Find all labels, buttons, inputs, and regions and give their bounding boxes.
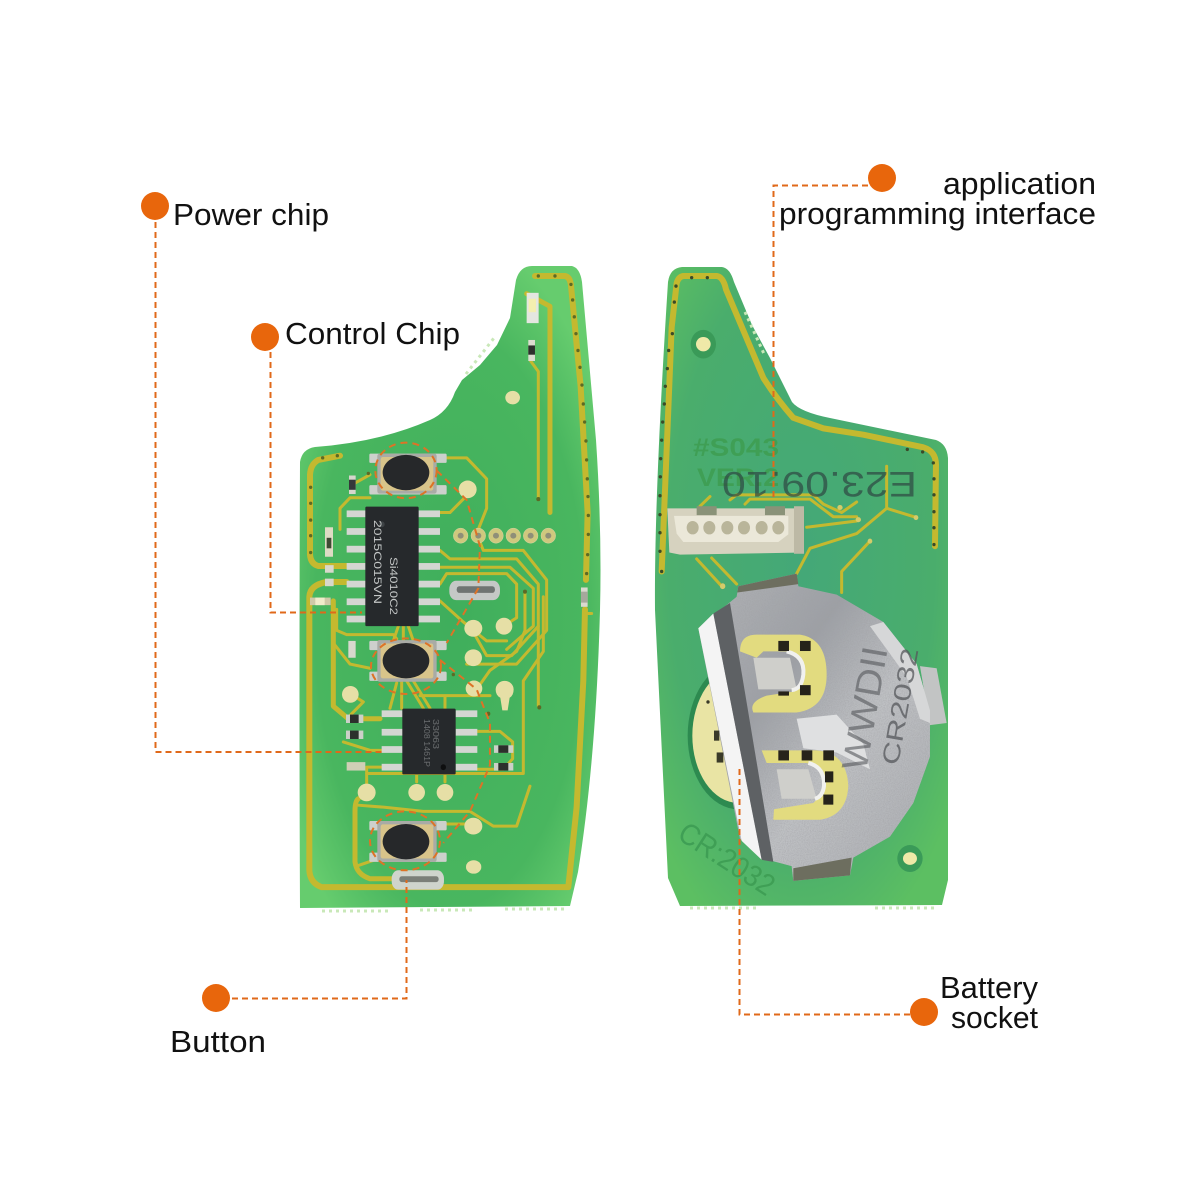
callout: button: [170, 880, 406, 1059]
circuit traces: [333, 458, 592, 866]
via dots right: [658, 276, 936, 573]
board outline left: [300, 266, 600, 908]
tact switches: [369, 454, 447, 862]
chip marking Si4010C2: [371, 520, 399, 615]
chip marking second IC: 1408 1461P: [422, 719, 431, 767]
board detail traces and parts left: [309, 274, 592, 890]
callout: application programming interface: programming interface: [779, 196, 1096, 231]
programming through-holes: [453, 528, 556, 543]
chip marking second IC: [422, 719, 440, 767]
silk text S043: #S043: [693, 434, 779, 462]
chip marking Si4010C2: Si4010C2: [387, 557, 399, 615]
pads: [342, 391, 520, 874]
board detail right: [658, 276, 947, 881]
callout: power chip: [141, 192, 385, 752]
board silk text holder pads: [691, 330, 923, 872]
chip marking second IC: 33063: [431, 719, 440, 750]
contact pad dots: [706, 700, 723, 763]
panel: right PCB back side: [655, 267, 948, 908]
callout: button: Button: [170, 1024, 266, 1059]
break-off teeth left: [322, 338, 566, 911]
holder marking WWDII: WWDII: [834, 643, 896, 773]
orange dashed button markers: [370, 443, 490, 870]
callout: application programming interface: [774, 164, 1096, 500]
silk text VER.2: VER.2: [697, 464, 779, 492]
via dots: [309, 274, 590, 716]
break-off teeth right: [690, 312, 938, 908]
stamped date code: E23.09.10: [722, 464, 917, 503]
battery contact pad: [688, 662, 789, 809]
IC bodies: [365, 507, 456, 774]
board outline right: [655, 267, 948, 906]
battery holder metal clip: [698, 574, 947, 881]
chip marking Si4010C2: 2015C015VN: [371, 520, 383, 604]
callout: application programming interface: application: [943, 166, 1096, 201]
connector: [667, 506, 804, 555]
callout: control chip: Control Chip: [285, 316, 460, 351]
callout: control chip: [251, 316, 460, 612]
IC pins: [347, 510, 477, 771]
silk text CR2032: CR:2032: [672, 816, 781, 903]
callout: battery socket: [740, 768, 1038, 1035]
panel: left PCB front side: [300, 266, 600, 911]
upper spring tab: [740, 635, 827, 712]
edge traces: [309, 276, 588, 887]
small passive components: [310, 293, 588, 771]
lower spring tab: [762, 750, 848, 820]
callout: battery socket: socket: [951, 1000, 1038, 1035]
holder marking CR2032: CR2032: [877, 646, 924, 767]
edge and circuit traces: [662, 276, 936, 593]
callout: power chip: Power chip: [173, 197, 329, 232]
callout: battery socket: Battery: [940, 970, 1038, 1005]
crystals: [392, 581, 500, 890]
